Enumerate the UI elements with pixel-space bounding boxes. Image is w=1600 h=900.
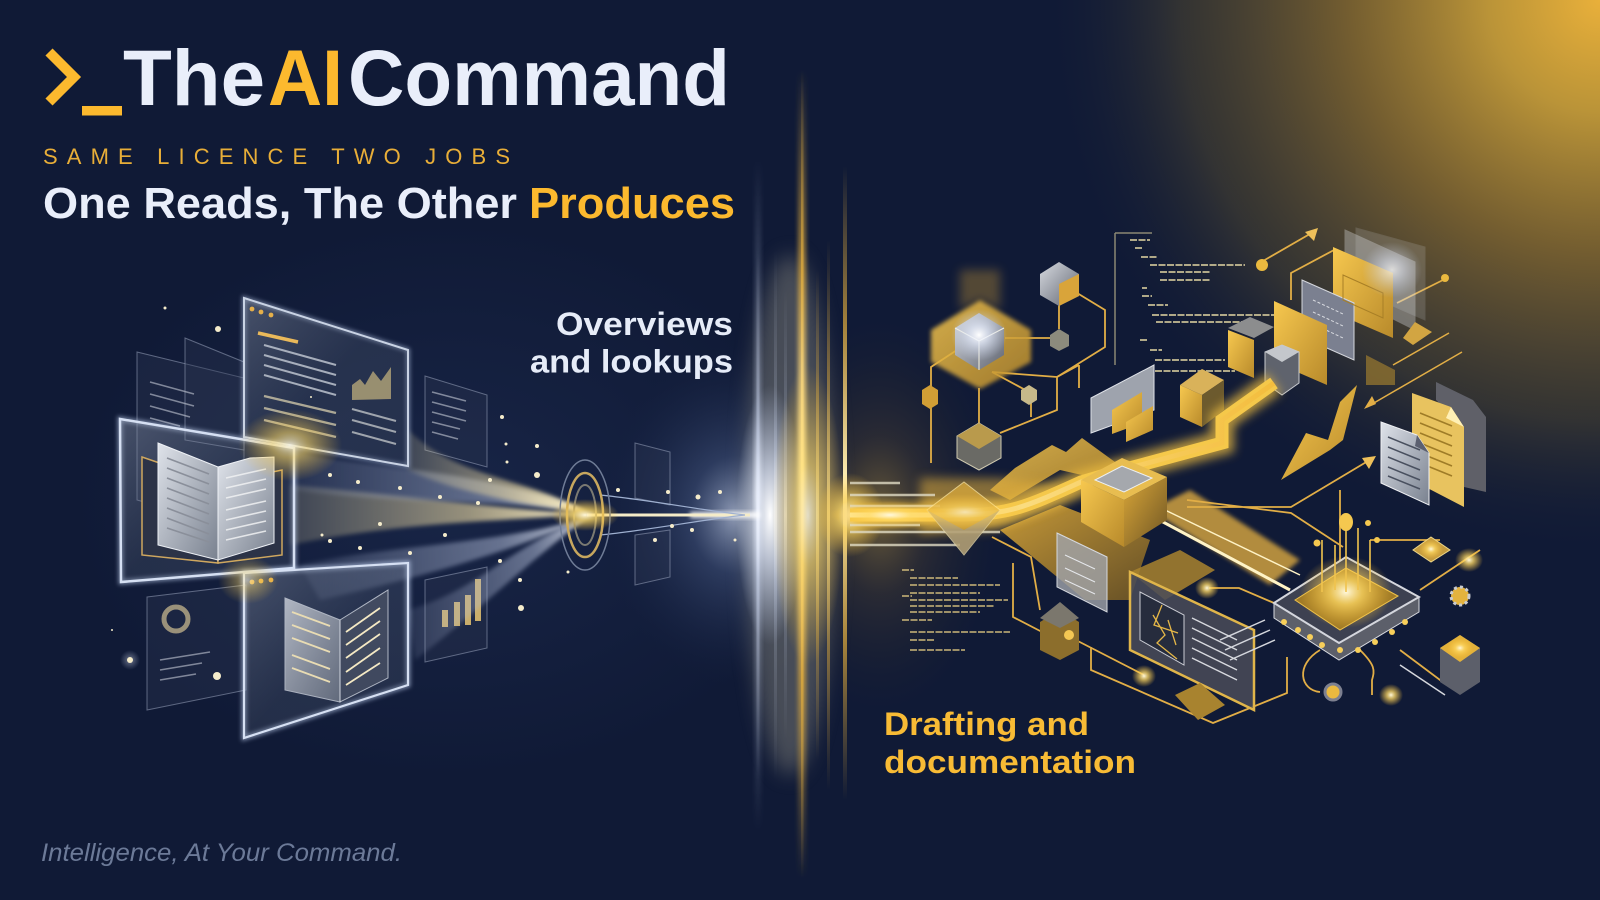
upper code block [1115,233,1282,371]
prompt chevron [49,52,74,102]
left ambient glow [70,220,830,780]
open book [142,443,282,563]
label: overviews and lookups: and lookups [530,344,733,380]
documents [1381,382,1486,507]
chip [1274,513,1419,660]
eyebrow: SAME LICENCE TWO JOBS [43,144,510,169]
headline: Produces [529,179,735,228]
particles [111,306,736,680]
lower window panel [244,563,408,738]
headline: One Reads, The Other [43,179,517,228]
donut chart [164,607,188,631]
gold upward arrow [1281,385,1357,480]
panel details [150,382,466,680]
wordmark: Command [348,33,730,122]
hot point [551,499,619,531]
streams into lens [290,430,750,660]
right illustration: producing [830,228,1486,723]
label: drafting and documentation: documentation [884,744,1136,780]
logo [49,33,730,122]
label: drafting and documentation: Drafting and [884,706,1089,742]
wordmark: AI [268,33,343,122]
upper window panel [244,298,408,466]
arrowheads [1305,228,1376,469]
gold flow band [850,383,1300,590]
corner gold glow [1000,0,1600,600]
central cube [1081,458,1167,547]
left illustration: reading [111,298,750,738]
small floating panel [1057,533,1107,612]
mini bar chart [442,579,481,627]
back panels [137,338,670,710]
prompt underscore [82,106,122,116]
tagline: Intelligence, At Your Command. [41,839,402,867]
gold panel and block cluster [1228,301,1432,395]
broad gold bands [920,438,1300,600]
glass diamond [830,482,1025,555]
label: overviews and lookups: Overviews [556,306,733,342]
window cards [1091,365,1224,442]
book panel [120,419,294,582]
wordmark: The [123,33,265,122]
angled book [285,598,340,702]
glowing hexagon cube [931,270,1031,389]
lens rings [560,460,610,570]
small cubes [922,262,1079,470]
lower code block [902,570,1010,650]
gold paper stack [1256,228,1449,360]
central light divider [605,70,1000,878]
small gold cube [1040,602,1079,660]
chip nodes [1132,537,1483,706]
panel glow points [120,409,342,670]
circuit lines [931,231,1480,723]
monitor [1130,572,1254,720]
